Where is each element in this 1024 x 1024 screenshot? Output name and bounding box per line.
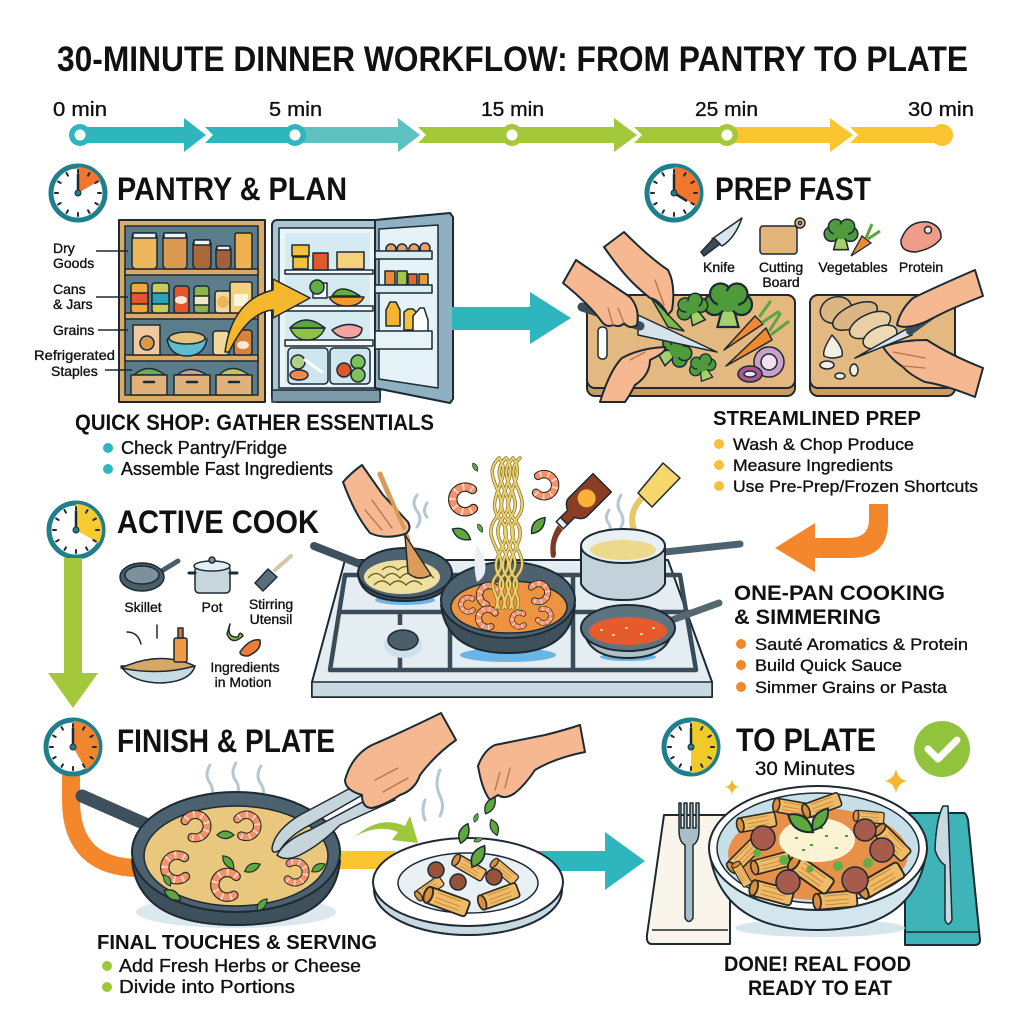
cutting board right <box>810 270 983 397</box>
hand bottom <box>600 347 665 402</box>
hand with tongs <box>345 713 456 808</box>
icon: vegetables <box>824 219 880 256</box>
arrow: 0 to 5 min <box>80 118 206 152</box>
garlic <box>820 335 858 379</box>
arrow: prep to cook <box>775 504 888 572</box>
text: done: READY TO EAT <box>748 977 892 1000</box>
sauce bottle <box>550 474 611 558</box>
text: final touches: Add Fresh Herbs or Cheese <box>119 956 361 976</box>
label: skillet: Skillet <box>124 599 162 615</box>
steam pot <box>606 495 623 534</box>
text: one-pan cooking: ONE-PAN COOKING <box>734 582 945 605</box>
text: quick shop: Assemble Fast Ingredients <box>121 459 333 479</box>
label: refrigerated staples <box>34 347 132 379</box>
text: one-pan cooking: & SIMMERING <box>734 606 881 629</box>
steam <box>207 763 264 800</box>
icon: knife <box>701 218 742 256</box>
sliced chicken <box>817 292 901 354</box>
icon: protein <box>901 222 941 252</box>
jars: grains <box>133 325 252 356</box>
panel: to plate <box>647 720 980 1000</box>
arrow: 25 min yellow part <box>727 118 853 152</box>
noodles falling <box>491 458 522 608</box>
pantry shelves <box>119 220 265 402</box>
steam <box>414 495 427 527</box>
heading: prep fast: PREP FAST <box>715 171 871 207</box>
icon: clock final <box>664 720 718 774</box>
plate <box>373 838 563 935</box>
label: cans and jars: & Jars <box>53 296 93 312</box>
label: ingredients in motion: in Motion <box>215 674 271 690</box>
arrow: cook to finish <box>48 558 98 708</box>
hand sprinkling herbs <box>478 725 585 800</box>
subheading: 30 minutes: 30 Minutes <box>755 759 855 780</box>
marker: 5 min <box>284 124 306 146</box>
pot <box>581 529 740 600</box>
icon: stirring utensil <box>255 556 291 591</box>
timeline <box>53 99 974 152</box>
text: streamlined prep: STREAMLINED PREP <box>713 408 921 430</box>
knife on board <box>582 307 717 352</box>
wok <box>441 562 575 653</box>
label: cans and jars <box>53 281 128 312</box>
label: 0 min: 0 min <box>53 99 107 121</box>
text: done <box>724 953 911 1000</box>
text: final touches: Divide into Portions <box>119 977 295 997</box>
label: stirring utensil <box>249 596 293 627</box>
label: 5 min: 5 min <box>269 99 322 121</box>
label: dry goods: Goods <box>53 255 94 271</box>
spatula and hand <box>343 465 431 578</box>
jars: dry goods <box>132 233 252 269</box>
arrow: plate to final <box>535 832 645 890</box>
text: streamlined prep: Measure Ingredients <box>733 456 893 475</box>
label: protein: Protein <box>899 259 943 275</box>
fridge <box>272 213 453 403</box>
icon: knife <box>935 806 952 924</box>
connector: yellow <box>330 851 395 869</box>
icon: clock finish <box>46 720 100 774</box>
steam plate <box>423 770 442 820</box>
arrow: 5 to 15 min <box>295 118 420 152</box>
marker: 0 min <box>69 124 91 146</box>
label: refrigerated staples: Staples <box>51 363 98 379</box>
hand top <box>604 232 673 315</box>
napkin right <box>905 813 980 945</box>
marker: 25 min <box>716 124 738 146</box>
steam wok <box>474 545 485 582</box>
icon: fork <box>679 803 699 922</box>
text: quick shop <box>75 410 434 479</box>
label: knife: Knife <box>703 259 735 275</box>
label: cutting board: Cutting <box>759 259 803 275</box>
text: one-pan cooking: Build Quick Sauce <box>755 656 902 675</box>
arrow: pantry to prep <box>452 292 571 344</box>
icon: pot <box>189 557 237 593</box>
flames <box>375 595 656 662</box>
hand lower right <box>883 340 983 397</box>
icon: cutting board <box>760 218 805 254</box>
label: stirring utensil: Stirring <box>249 596 293 612</box>
text: one-pan cooking <box>734 582 968 697</box>
jars: cans and jars <box>131 282 252 313</box>
marker: 15 min <box>501 124 523 146</box>
crates: refrigerated staples <box>131 368 252 395</box>
text: streamlined prep: Wash & Chop Produce <box>733 435 914 454</box>
sparkle right <box>885 769 907 793</box>
text: final touches <box>97 932 377 997</box>
label: pot: Pot <box>201 599 223 615</box>
icon: clock cook <box>49 503 103 557</box>
label: ingredients in motion <box>210 659 280 690</box>
oil bottle pouring <box>625 463 680 558</box>
text: streamlined prep: Use Pre-Prep/Frozen Shortcuts <box>733 477 978 496</box>
skillet with noodles <box>314 546 452 601</box>
pasta <box>725 792 912 910</box>
sparkle left <box>725 779 739 795</box>
text: one-pan cooking: Sauté Aromatics & Protein <box>755 635 968 654</box>
text: final touches: FINAL TOUCHES & SERVING <box>97 932 377 954</box>
pantry labels <box>34 240 132 379</box>
heading: active cook: ACTIVE COOK <box>117 504 319 540</box>
hand with leek <box>650 296 684 331</box>
hand upper right <box>897 270 983 327</box>
heading: finish and plate: FINISH & PLATE <box>117 723 335 759</box>
connector: orange <box>71 775 140 868</box>
herbs falling <box>456 795 501 845</box>
fridge food <box>290 243 432 382</box>
icon: clock prep <box>647 166 701 220</box>
bowl <box>709 786 927 937</box>
leaves flying <box>450 462 548 543</box>
icon: check badge <box>914 721 970 777</box>
green curved arrow <box>356 816 418 843</box>
sauce pan <box>581 603 719 658</box>
burner <box>384 630 422 658</box>
icon: ingredients bowl <box>121 625 195 683</box>
label: refrigerated staples: Refrigerated <box>34 347 115 363</box>
arrow: 5 min dark part <box>205 127 295 143</box>
label: stirring utensil: Utensil <box>250 611 292 627</box>
label: ingredients in motion: Ingredients <box>210 659 280 675</box>
text: done: DONE! REAL FOOD <box>724 953 911 976</box>
arrow: to 30 min <box>850 127 942 143</box>
stove <box>312 560 712 697</box>
label: grains: Grains <box>53 322 94 338</box>
text: one-pan cooking: Simmer Grains or Pasta <box>755 678 948 697</box>
marker: 30 min <box>931 124 953 146</box>
arrow: pantry to fridge <box>225 279 310 352</box>
text: quick shop: QUICK SHOP: GATHER ESSENTIALS <box>75 410 434 435</box>
arrow: 25 min green part <box>634 127 727 143</box>
label: 25 min: 25 min <box>695 99 758 121</box>
basil <box>785 805 833 837</box>
text: streamlined prep <box>713 408 978 496</box>
heading: pantry and plan: PANTRY & PLAN <box>117 171 347 207</box>
knife right <box>855 313 935 358</box>
pan <box>82 792 340 928</box>
label: 30 min: 30 min <box>908 99 974 121</box>
carrots <box>724 302 788 366</box>
panel: active cook <box>48 458 968 708</box>
heading: to plate: TO PLATE <box>736 722 876 758</box>
shrimp flying <box>453 473 557 512</box>
panel: prep fast <box>563 166 983 496</box>
panel: finish and plate <box>46 713 645 997</box>
arrow: 15 to 25 min <box>418 118 637 152</box>
napkin left <box>647 815 730 944</box>
panel: pantry and plan <box>34 166 453 479</box>
tongs <box>272 768 395 858</box>
label: cans and jars: Cans <box>53 281 86 297</box>
cheese <box>779 818 855 862</box>
cutting board left <box>563 232 795 402</box>
label: dry goods: Dry <box>53 240 75 256</box>
icon: clock pantry <box>51 166 105 220</box>
hand left <box>563 260 638 327</box>
onion <box>738 347 784 382</box>
icon: skillet <box>120 561 178 591</box>
label: cutting board: Board <box>762 274 800 290</box>
label: dry goods <box>53 240 128 271</box>
label: 15 min: 15 min <box>481 99 544 121</box>
icon: ingredients in motion <box>227 624 260 656</box>
label: cutting board <box>759 259 803 290</box>
text: quick shop: Check Pantry/Fridge <box>121 438 287 458</box>
label: vegetables: Vegetables <box>818 259 888 275</box>
